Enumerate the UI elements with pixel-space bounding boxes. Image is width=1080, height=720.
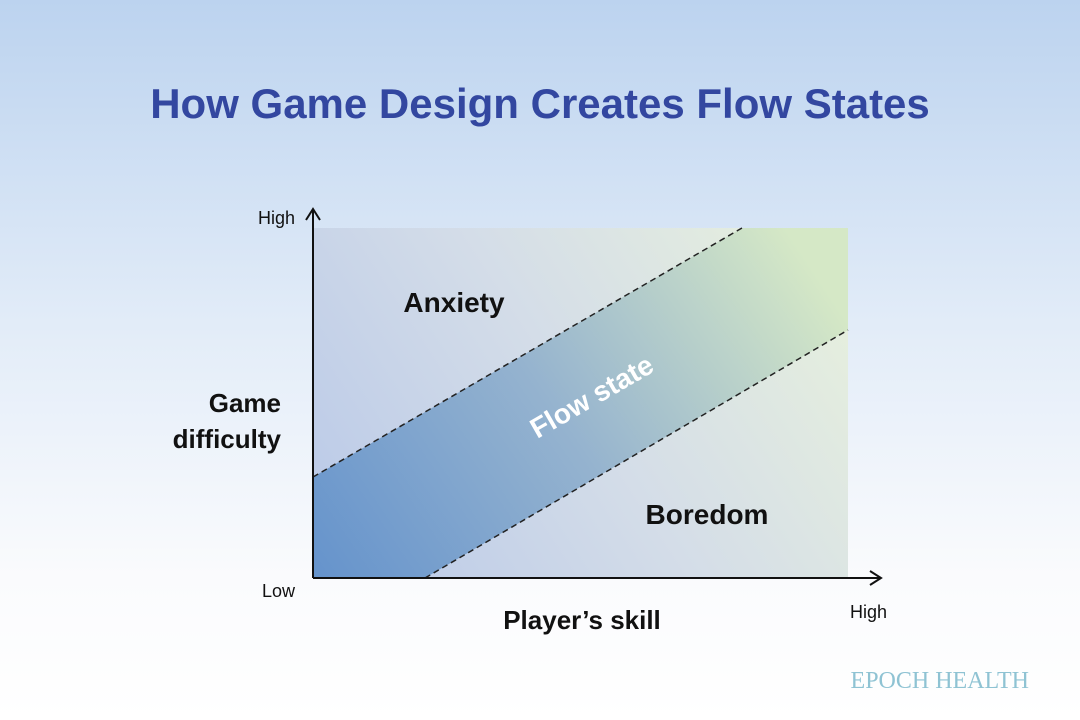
flow band (313, 228, 848, 578)
y axis (306, 209, 320, 578)
chart (306, 209, 881, 585)
label: anxiety: Anxiety (403, 287, 505, 318)
y axis high label: High (258, 208, 295, 228)
y axis title: Game (209, 388, 281, 418)
logo: EPOCH HEALTH (851, 668, 1029, 694)
y axis title: difficulty (173, 424, 282, 454)
chart area background (313, 228, 848, 578)
y axis low label: Low (262, 581, 296, 601)
title: How Game Design Creates Flow States (150, 80, 930, 127)
label: flow state: Flow state (525, 349, 659, 444)
x axis (313, 571, 881, 585)
dashed boundary lower (425, 330, 848, 578)
dashed boundary upper (313, 228, 742, 477)
x axis high label: High (850, 602, 887, 622)
label: boredom: Boredom (646, 499, 768, 530)
x axis title: Player’s skill (503, 605, 661, 635)
